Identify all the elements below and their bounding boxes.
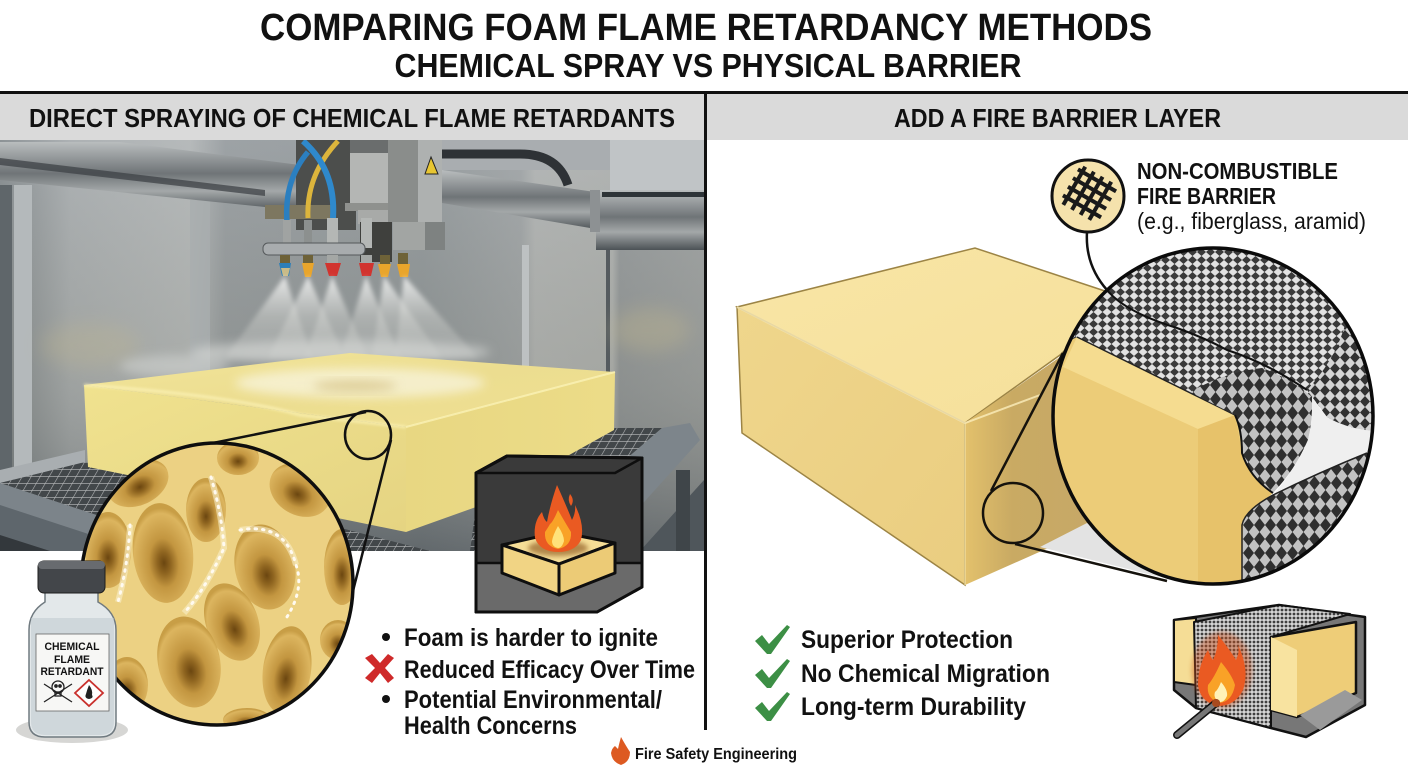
icon: red cross <box>365 654 394 683</box>
list: chemical spray drawbacks: Foam is harder to ignite <box>404 624 658 652</box>
title: COMPARING FOAM FLAME RETARDANCY METHODS <box>260 7 1152 49</box>
nozzles <box>279 253 410 277</box>
callout leader line <box>1087 232 1107 290</box>
icon: flammable hazard diamond <box>75 680 103 706</box>
fabric fold line <box>1107 290 1307 390</box>
flame <box>535 485 582 552</box>
left panel header: DIRECT SPRAYING OF CHEMICAL FLAME RETARDANTS <box>29 103 675 133</box>
header rule <box>0 91 1408 94</box>
bottle label <box>36 634 109 711</box>
fold with larger weave <box>1190 368 1312 493</box>
chemical bottle <box>16 561 128 743</box>
list: chemical spray drawbacks <box>365 624 695 740</box>
bottle label: RETARDANT <box>40 666 104 678</box>
icon: mesh fabric <box>1052 160 1124 232</box>
list: fire barrier benefits: Superior Protection <box>801 626 1013 654</box>
icon: green check <box>755 659 790 688</box>
upper fabric <box>1072 250 1362 430</box>
callout: non-combustible fire barrier: FIRE BARRIER <box>1137 183 1276 209</box>
foam <box>1054 337 1243 582</box>
list: chemical spray drawbacks: Health Concerns <box>404 712 577 740</box>
magnified foam cell structure <box>80 440 360 732</box>
spray head <box>263 140 445 277</box>
icon: green check <box>755 625 790 654</box>
foam block with barrier <box>737 248 1160 585</box>
spray mist <box>120 340 490 377</box>
white underside <box>1273 397 1372 495</box>
flame <box>1192 632 1252 708</box>
icon: small flame <box>611 737 630 765</box>
matchstick <box>1177 703 1216 735</box>
glossy coating on struts <box>118 477 296 613</box>
list: chemical spray drawbacks: Reduced Efficacy Over Time <box>404 656 695 684</box>
callout: non-combustible fire barrier: (e.g., fiberglass, aramid) <box>1137 208 1366 234</box>
gantry beams <box>0 142 704 250</box>
photo: spray machine over foam block <box>0 140 704 551</box>
zoom lens: small circle and connector lines <box>208 411 391 595</box>
left panel header <box>0 94 704 140</box>
icon: skull hazard <box>44 681 72 702</box>
center divider <box>704 94 707 730</box>
title: CHEMICAL SPRAY VS PHYSICAL BARRIER <box>394 47 1022 84</box>
footer: fire safety engineering: Fire Safety Engineering <box>635 746 797 763</box>
outer fold weave <box>1307 327 1372 431</box>
list: fire barrier benefits <box>755 625 1050 721</box>
zoom connector and small circle <box>983 353 1167 581</box>
callout: non-combustible fire barrier <box>1052 158 1366 290</box>
lower fabric <box>1242 452 1368 580</box>
bottle label: FLAME <box>54 654 90 666</box>
panel: add a fire barrier layer <box>707 94 1408 737</box>
foam block <box>84 353 615 532</box>
magnified barrier cross-section <box>1040 240 1385 590</box>
bottle label: CHEMICAL <box>44 641 100 653</box>
right panel header <box>707 94 1408 140</box>
conveyor grating <box>0 423 704 551</box>
title <box>260 7 1152 84</box>
icon: barrier-wrapped foam with match flame <box>1174 605 1365 737</box>
right panel header: ADD A FIRE BARRIER LAYER <box>894 103 1221 133</box>
icon: fire test chamber <box>476 456 642 612</box>
footer: fire safety engineering <box>611 737 797 765</box>
ground shadow <box>1040 523 1160 577</box>
callout: non-combustible fire barrier: NON-COMBUSTIBLE <box>1137 158 1338 184</box>
list: fire barrier benefits: Long-term Durability <box>801 693 1026 721</box>
list: chemical spray drawbacks: Potential Environmental/ <box>404 686 662 714</box>
panel: direct spraying of chemical flame retardants <box>0 94 704 743</box>
icon: green check <box>755 692 790 721</box>
list: fire barrier benefits: No Chemical Migration <box>801 660 1050 688</box>
spray cones <box>225 276 478 358</box>
